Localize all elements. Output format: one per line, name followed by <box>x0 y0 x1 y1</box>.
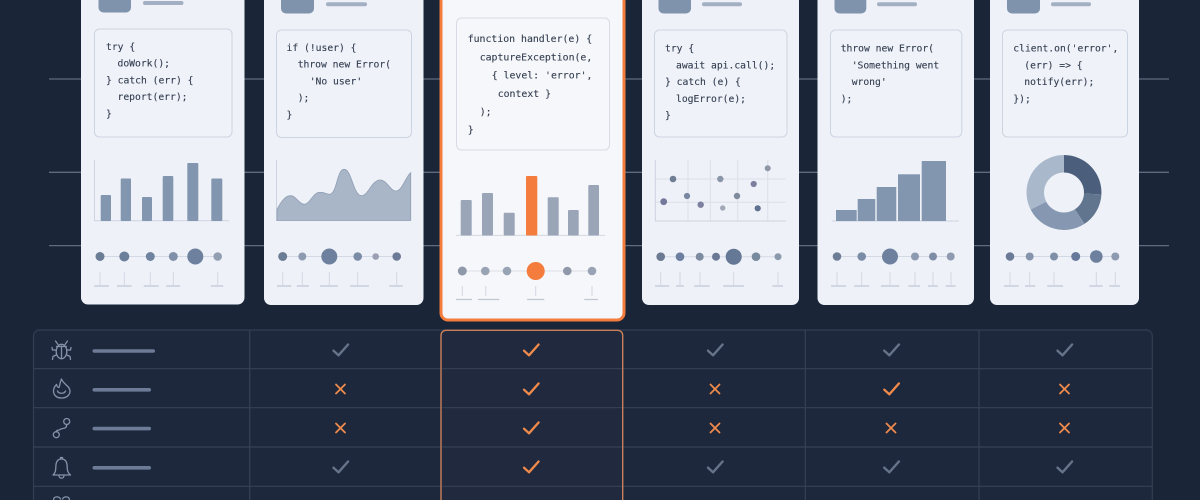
card 4 timeline <box>655 249 783 286</box>
card 3 bar chart <box>456 176 605 236</box>
panel: card 2 throw <box>264 0 424 305</box>
row label line 2 <box>92 388 151 392</box>
highlighted column outline <box>441 330 623 500</box>
card 6 code block: notify(err); <box>1024 77 1094 88</box>
column 2 marks <box>334 344 348 472</box>
card 3 timeline <box>456 262 598 300</box>
card 6 timeline <box>1004 250 1120 286</box>
card 4 scatter plot <box>655 160 786 221</box>
card 2 header icon <box>281 0 314 14</box>
card 6 donut chart <box>1027 155 1101 230</box>
card 5 code block: wrong' <box>852 77 887 88</box>
row label line 3 <box>92 427 151 430</box>
card 3 code block: { level: 'error', <box>492 71 592 82</box>
column 6 marks <box>1058 344 1072 472</box>
icon: flame <box>54 379 70 398</box>
card 6 code block: (err) => { <box>1024 60 1083 71</box>
card 4 code block: await api.call(); <box>676 60 775 71</box>
card 3 code block <box>456 18 610 150</box>
panel: card 5 new Error <box>818 0 974 305</box>
card 5 header line <box>877 2 917 6</box>
row label line 1 <box>92 349 155 353</box>
icon: partial fifth row icon <box>54 497 70 500</box>
icon: bug <box>52 341 71 360</box>
card 3 code block: captureException(e, <box>480 52 592 63</box>
card 2 timeline <box>277 248 403 286</box>
card 1 code block: try { <box>106 42 135 53</box>
card 1 code block <box>94 29 232 137</box>
comparison table <box>34 330 1152 500</box>
panel: card 1 try/catch <box>81 0 244 304</box>
card 5 code block <box>830 30 962 137</box>
card 1 code block: } catch (err) { <box>106 75 194 86</box>
column 4 marks <box>708 344 723 472</box>
card 1 code block: report(err); <box>118 92 188 103</box>
card 1 bar chart <box>94 160 229 221</box>
card 5 stepped histogram <box>832 161 959 221</box>
icon: git path <box>53 418 70 438</box>
card 1 header icon <box>98 0 131 12</box>
card 1 code block: } <box>106 109 112 120</box>
card 4 code block <box>654 30 787 137</box>
card 6 code block <box>1002 30 1128 137</box>
card 2 code block: 'No user' <box>310 76 362 88</box>
panel: card 3 highlighted captureException <box>441 0 624 320</box>
column 5 marks <box>884 344 899 472</box>
card 4 header icon <box>658 0 691 14</box>
card 2 code block: if (!user) { <box>286 43 356 54</box>
icon: bell <box>53 458 70 478</box>
card 3 code block: ); <box>480 107 492 118</box>
card 1 code block: doWork(); <box>118 59 170 70</box>
card 4 code block: logError(e); <box>676 94 746 105</box>
card 2 area chart <box>276 160 411 221</box>
row label line 4 <box>92 466 151 470</box>
card 2 code block: throw new Error( <box>298 60 391 71</box>
card 4 code block: } <box>665 111 671 122</box>
card 2 header line <box>326 2 367 6</box>
card 4 code block: } catch (e) { <box>665 77 741 88</box>
card 1 header line <box>143 1 184 5</box>
card 5 code block: throw new Error( <box>841 44 934 54</box>
card 4 code block: try { <box>665 44 694 54</box>
card 2 code block <box>276 30 412 138</box>
card 2 code block: ); <box>298 93 309 104</box>
card 2 code block: } <box>286 110 292 121</box>
card 5 code block: 'Something went <box>852 60 939 71</box>
card 3 code block: context } <box>498 89 551 100</box>
card 6 header icon <box>1007 0 1040 14</box>
card 5 header icon <box>834 0 866 14</box>
card 1 timeline <box>94 248 223 286</box>
card 5 timeline <box>831 248 956 286</box>
card 4 header line <box>702 2 742 6</box>
card 6 code block: }); <box>1013 94 1031 105</box>
card 5 code block: ); <box>841 94 852 105</box>
card 6 header line <box>1051 2 1091 6</box>
card 3 code block: function handler(e) { <box>468 34 592 45</box>
column 3 marks <box>524 344 539 472</box>
card 6 code block: client.on('error', <box>1013 44 1118 54</box>
panel: card 6 event listener <box>990 0 1139 305</box>
panel: card 4 async try/catch <box>642 0 799 305</box>
card 3 code block: } <box>468 125 474 136</box>
